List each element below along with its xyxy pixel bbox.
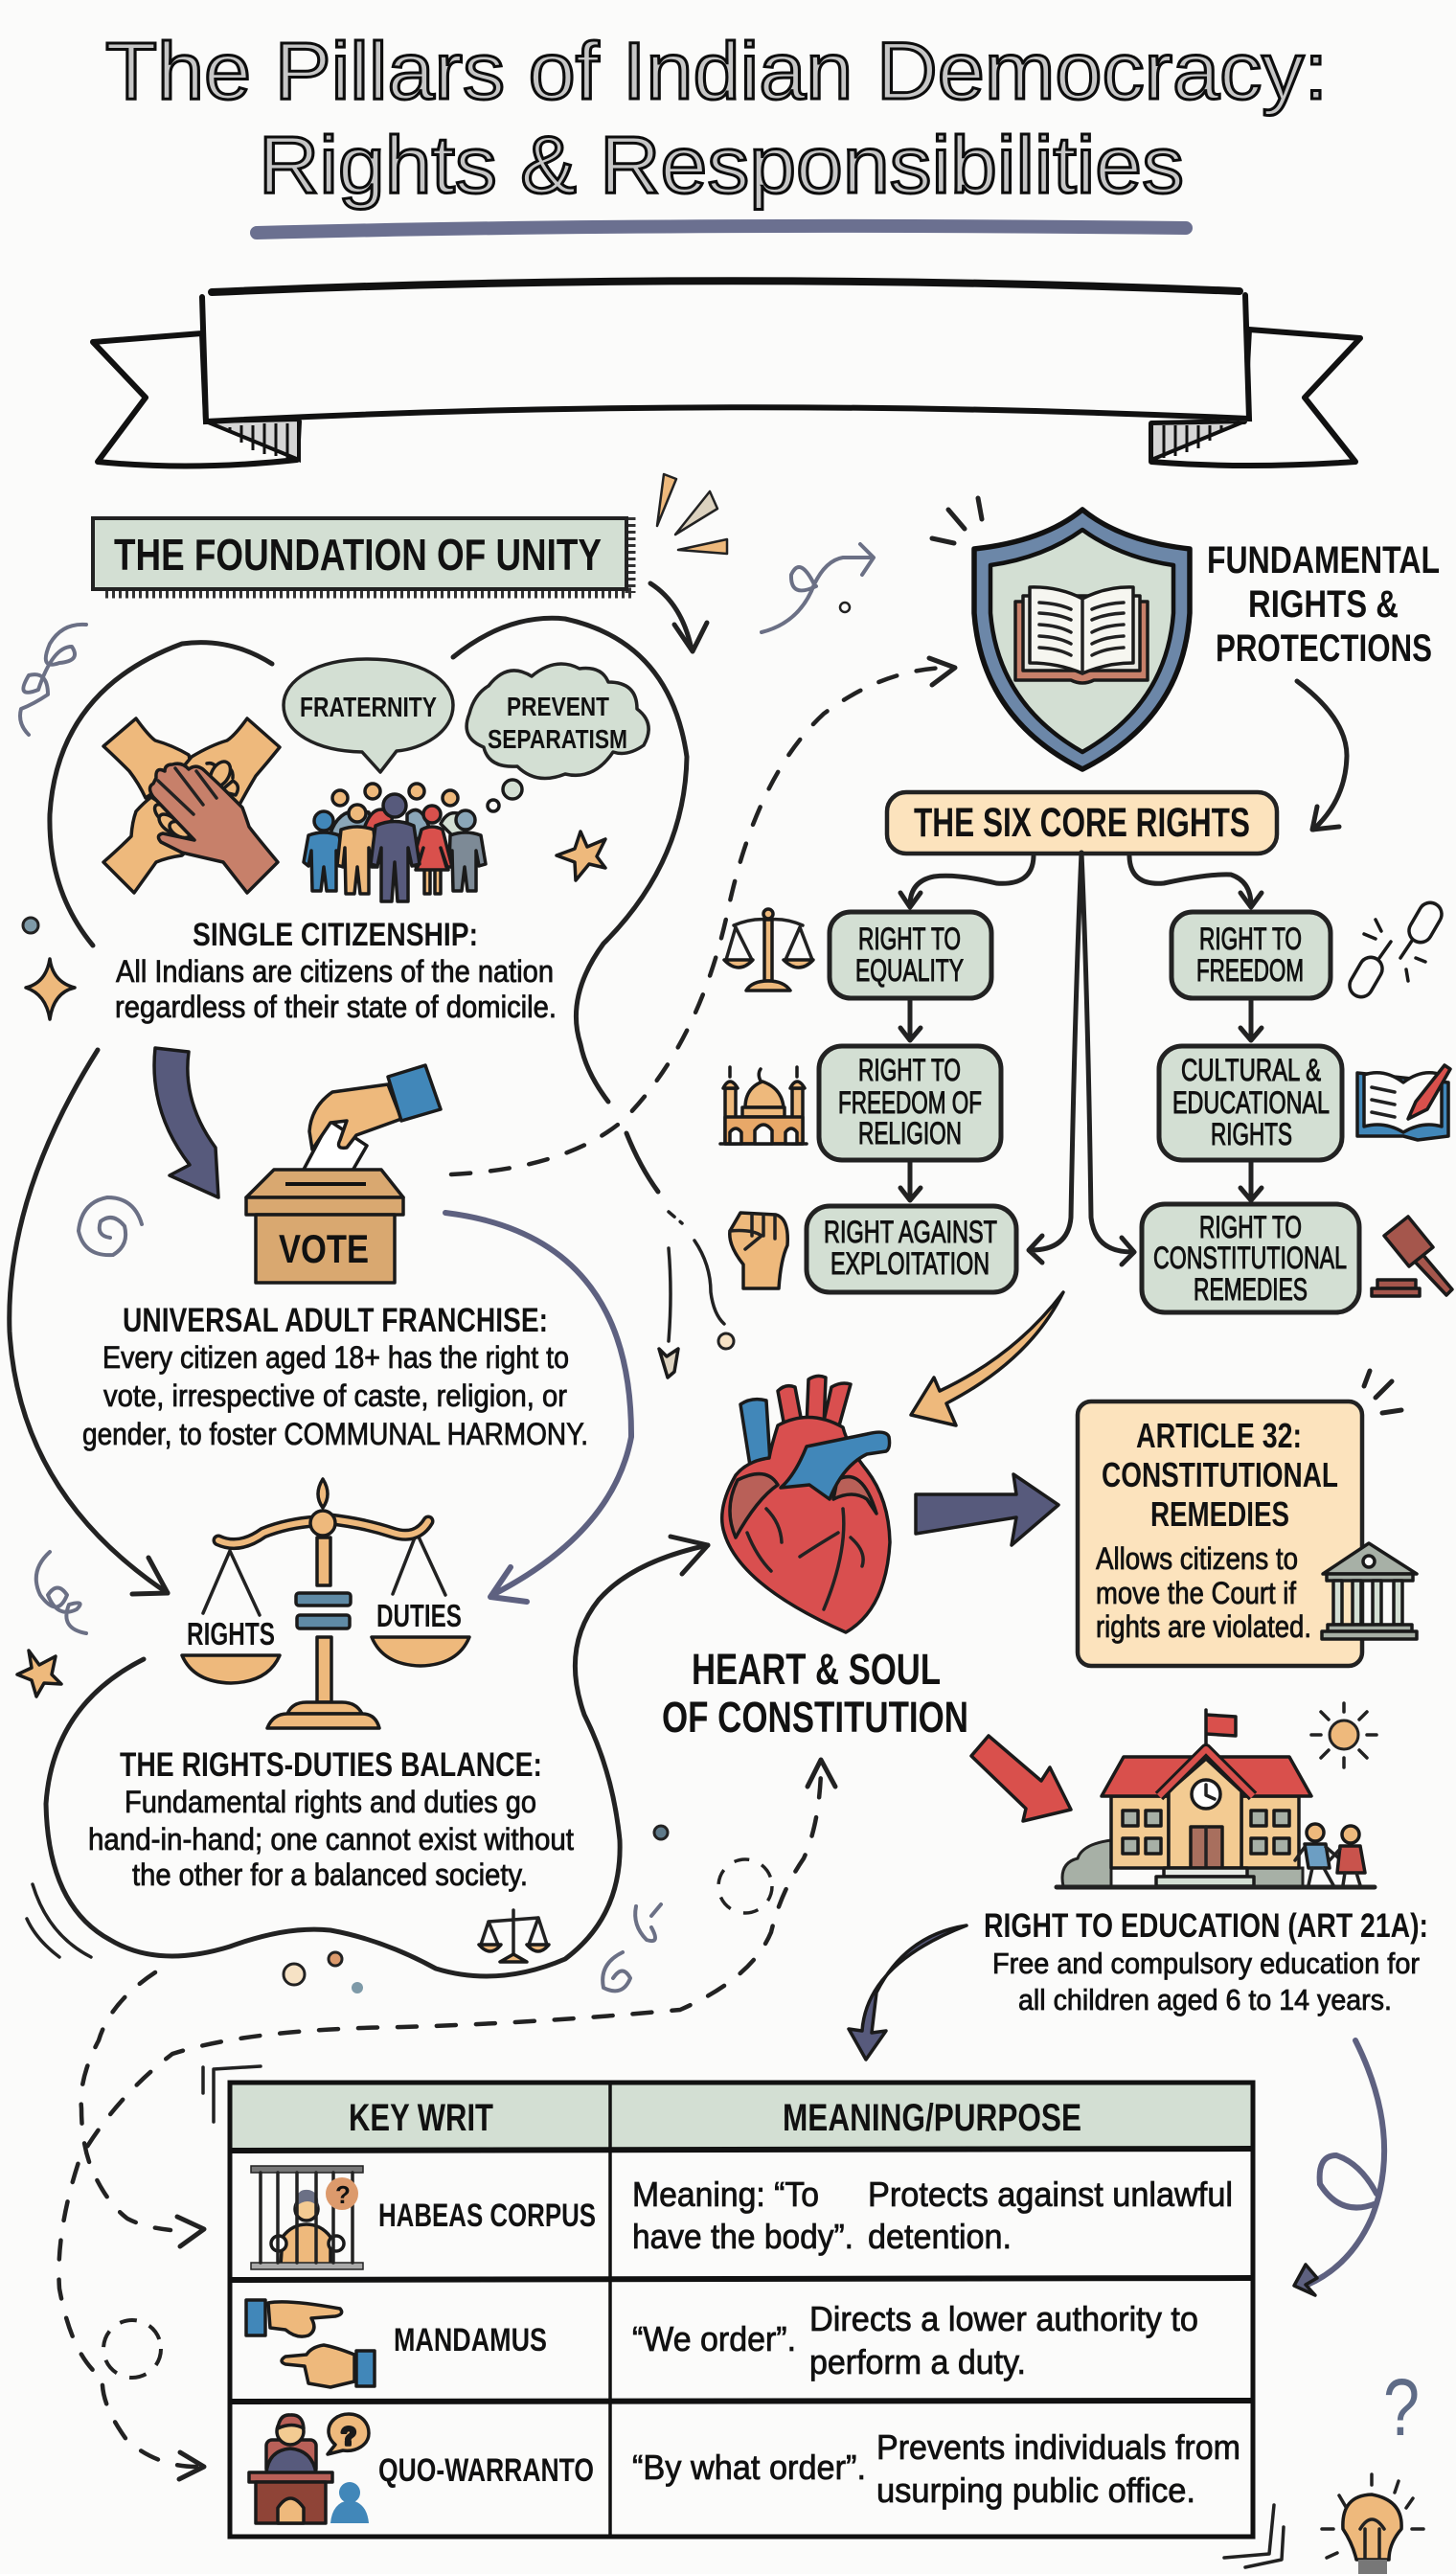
panel: article 32: [1078, 1401, 1417, 1666]
icon: large balance scales: DUTIES: [376, 1598, 462, 1633]
title: Rights & Responsibilities: [259, 120, 1184, 210]
icon: star: [557, 831, 605, 880]
dashed arrow: quo-warranto to heart: [58, 1760, 835, 2479]
row: quo-warranto: Prevents individuals from: [876, 2427, 1240, 2467]
arrow: badge to panel: [650, 583, 707, 651]
text: right to education: [984, 1907, 1428, 2016]
grey squiggle: [762, 544, 874, 632]
dot: [23, 918, 38, 933]
icon: court building: [1322, 1543, 1417, 1639]
text: single citizenship: [115, 917, 557, 1024]
arrow: heading to six core rights: [1297, 681, 1347, 830]
title underline: [257, 226, 1186, 233]
panel: article 32: ARTICLE 32:: [1136, 1416, 1302, 1455]
box: right to freedom of religion: [819, 1046, 1001, 1160]
box: cultural and educational rights: RIGHTS: [1211, 1117, 1292, 1151]
article emphasis ticks: [1364, 1371, 1401, 1413]
icon: open book with brush: [1357, 1065, 1450, 1140]
box: right to constitutional remedies: REMEDIES: [1194, 1272, 1308, 1307]
dashed arrow: vote to fundamental rights: [451, 658, 955, 1174]
row: mandamus: [246, 2299, 1198, 2387]
icon: prisoner behind bars: [251, 2166, 363, 2269]
box: right to constitutional remedies: [1142, 1204, 1359, 1312]
text: rights-duties balance: Fundamental rights and duties go: [125, 1785, 536, 1819]
icon: sun: [1311, 1703, 1376, 1767]
box: right to freedom: [1172, 912, 1331, 998]
table header: KEY WRIT: [349, 2097, 493, 2139]
panel: article 32: rights are violated.: [1096, 1609, 1311, 1644]
balance outline curve: [46, 1537, 708, 1976]
text: universal adult franchise: vote, irrespective of caste, religion, or: [103, 1378, 567, 1413]
decorative left curls, star and lines: [17, 1552, 91, 1957]
title: The Pillars of Indian Democracy:: [105, 26, 1328, 116]
box: right to equality: RIGHT TO: [858, 922, 961, 956]
box: right to constitutional remedies: RIGHT TO: [1199, 1210, 1302, 1244]
icon: shield with book: [974, 510, 1190, 769]
citizenship outline curve: [50, 618, 687, 1192]
row: mandamus: MANDAMUS: [394, 2322, 547, 2358]
box: right to equality: [830, 912, 991, 998]
box: right to constitutional remedies: CONSTITUTIONAL: [1153, 1241, 1347, 1275]
arrow: heart to school: [971, 1736, 1071, 1821]
box: right to freedom of religion: RELIGION: [858, 1116, 962, 1150]
icon: broken chain: [1346, 899, 1445, 1001]
text: right to education: Free and compulsory education for: [992, 1947, 1420, 1980]
box: right to freedom: FREEDOM: [1196, 953, 1304, 988]
icon: attention sparks: [657, 474, 727, 554]
arrow: looping arrow to table: [1294, 2040, 1384, 2295]
text: universal adult franchise: [82, 1302, 588, 1451]
arrow: citizenship to vote: [154, 1048, 218, 1197]
text: single citizenship: SINGLE CITIZENSHIP:: [193, 917, 478, 953]
row: quo-warranto: [249, 2414, 1240, 2523]
text: single citizenship: All Indians are citizens of the nation: [116, 954, 554, 989]
row: habeas corpus: detention.: [868, 2217, 1012, 2256]
icon: prisoner behind bars: ?: [335, 2180, 351, 2209]
box: cultural and educational rights: CULTURAL &: [1181, 1053, 1321, 1087]
icon: pointing hands: [246, 2300, 375, 2387]
icon: equality scales: [724, 909, 813, 991]
box: right to freedom of religion: RIGHT TO: [858, 1053, 961, 1087]
icon: raised fist: [730, 1213, 787, 1288]
text: single citizenship: regardless of their state of domicile.: [115, 990, 557, 1024]
icon: judge at podium: ?: [341, 2422, 356, 2450]
table header: MEANING/PURPOSE: [783, 2097, 1081, 2139]
six core rights heading: THE SIX CORE RIGHTS: [914, 800, 1250, 846]
speech bubble: fraternity: FRATERNITY: [300, 693, 437, 723]
shield emphasis ticks: [932, 498, 982, 543]
icon: large balance scales: [182, 1479, 469, 1728]
row: habeas corpus: Protects against unlawful: [868, 2175, 1233, 2214]
row: habeas corpus: [251, 2166, 1233, 2269]
box: right to equality: EQUALITY: [855, 953, 964, 988]
icon: ballot box and hand: [246, 1065, 441, 1283]
dashed arrow: balance to habeas corpus: [81, 1972, 204, 2246]
text: heart and soul: [662, 1645, 968, 1742]
text: rights-duties balance: THE RIGHTS-DUTIES BALANCE:: [120, 1746, 542, 1784]
arrow: heart to article 32: [916, 1474, 1058, 1545]
text: universal adult franchise: UNIVERSAL ADULT FRANCHISE:: [123, 1302, 548, 1339]
text: rights-duties balance: hand-in-hand; one cannot exist without: [88, 1822, 574, 1856]
decorative dots and swirls: [284, 1826, 668, 1993]
icon: judge at podium: [249, 2414, 369, 2523]
panel: single citizenship: [20, 618, 687, 1192]
row: quo-warranto: usurping public office.: [876, 2471, 1195, 2510]
empty ribbon banner: [93, 280, 1360, 467]
icon: large balance scales: RIGHTS: [187, 1616, 275, 1651]
box: right against exploitation: EXPLOITATION: [830, 1246, 990, 1281]
row: habeas corpus: have the body”.: [632, 2217, 853, 2256]
row: habeas corpus: HABEAS CORPUS: [378, 2198, 596, 2234]
six core rights heading: [887, 792, 1277, 854]
thought cloud: prevent separatism: PREVENT: [507, 692, 609, 721]
icon: joined hands: [103, 718, 280, 893]
row: quo-warranto: QUO-WARRANTO: [378, 2452, 594, 2489]
icon: gavel: [1372, 1217, 1452, 1296]
text: heart and soul: OF CONSTITUTION: [662, 1693, 968, 1742]
title: [105, 26, 1328, 210]
icon: small scales: [479, 1910, 549, 1962]
icon: light bulb: [1322, 2474, 1423, 2574]
foundation heading badge: [93, 517, 634, 593]
table header: [349, 2097, 1081, 2139]
text: universal adult franchise: Every citizen aged 18+ has the right to: [102, 1340, 569, 1375]
grey curl: [20, 625, 86, 735]
thought cloud: prevent separatism: SEPARATISM: [488, 724, 627, 754]
text: heart and soul: HEART & SOUL: [692, 1645, 941, 1694]
icon: question mark: ?: [1383, 2362, 1420, 2452]
flow arrows: six rights tree: [900, 853, 1262, 1264]
arrow: vote to scales: [445, 1213, 631, 1602]
thought cloud: prevent separatism: [466, 664, 648, 811]
text: fundamental rights heading: RIGHTS &: [1248, 583, 1399, 626]
text: universal adult franchise: gender, to foster COMMUNAL HARMONY.: [82, 1417, 588, 1451]
row: mandamus: Directs a lower authority to: [809, 2299, 1198, 2338]
icon: ballot box and hand: VOTE: [279, 1226, 369, 1271]
text: fundamental rights heading: [1207, 539, 1440, 670]
box: right to freedom of religion: FREEDOM OF: [838, 1085, 982, 1120]
row: mandamus: “We order”.: [632, 2319, 796, 2358]
row: mandamus: perform a duty.: [809, 2342, 1026, 2381]
foundation heading badge: THE FOUNDATION OF UNITY: [114, 530, 602, 580]
arrow: left curve to scales: [10, 1050, 168, 1594]
icon: school: [1057, 1710, 1375, 1887]
small dashed wiggle arrows: [659, 1212, 734, 1378]
text: rights-duties balance: [88, 1746, 574, 1892]
arrow: education to table: [849, 1925, 967, 2060]
panel: key writ table: [230, 2083, 1253, 2537]
icon: group of people: [304, 784, 486, 901]
panel: article 32: CONSTITUTIONAL: [1102, 1455, 1338, 1494]
row: habeas corpus: Meaning: “To: [632, 2175, 819, 2214]
table corner marks: [203, 2066, 1284, 2567]
row: quo-warranto: “By what order”.: [632, 2448, 866, 2487]
text: rights-duties balance: the other for a balanced society.: [132, 1857, 528, 1892]
box: cultural and educational rights: EDUCATIONAL: [1172, 1085, 1330, 1120]
arrow: remedies to heart: [911, 1292, 1063, 1425]
icon: heart: [722, 1376, 890, 1632]
box: right against exploitation: RIGHT AGAINST: [824, 1215, 997, 1249]
icon: four point sparkle: [26, 959, 75, 1019]
panel: rights-duties balance: [46, 1537, 708, 1976]
speech bubble: fraternity: [284, 659, 453, 772]
grey spiral: [79, 1197, 142, 1255]
box: right against exploitation: [807, 1206, 1016, 1292]
box: right to freedom: RIGHT TO: [1199, 922, 1302, 956]
text: right to education: all children aged 6 to 14 years.: [1018, 1983, 1392, 2016]
panel: article 32: move the Court if: [1096, 1576, 1296, 1610]
panel: article 32: REMEDIES: [1150, 1494, 1289, 1534]
icon: mosque: [720, 1067, 807, 1144]
panel: article 32: Allows citizens to: [1096, 1541, 1298, 1576]
box: cultural and educational rights: [1159, 1046, 1342, 1160]
